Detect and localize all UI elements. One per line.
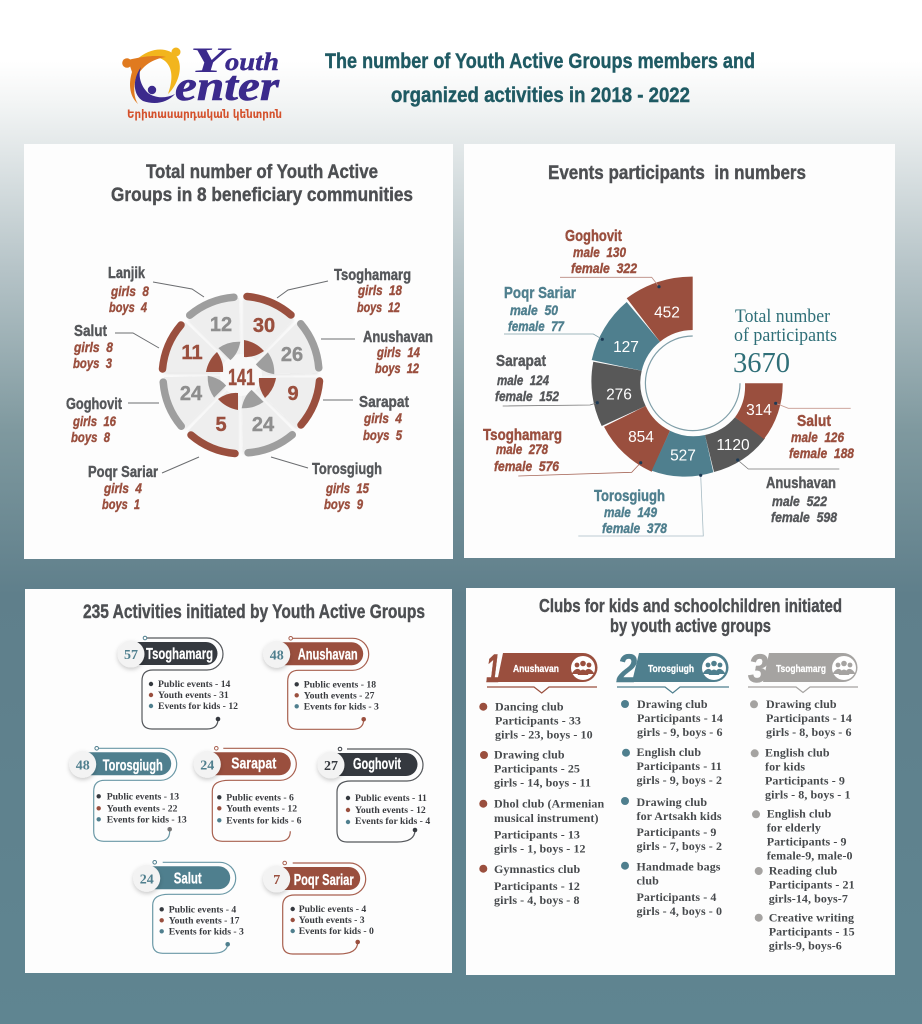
club list: Tsoghamarg: Participants - 9 (765, 774, 845, 788)
label: Goghovit (66, 396, 123, 445)
icon: yellow figure (136, 48, 180, 94)
panel: total number of groups (24, 144, 453, 559)
label: Salut: female 188 (789, 445, 854, 461)
card: Poqr Sariar: Public events - 4 (299, 904, 366, 915)
club list: Anushavan (479, 700, 604, 907)
club list: Torosgiugh: Participants - 4 (636, 890, 716, 904)
label: Anushavan: male 522 (772, 493, 827, 509)
card: Salut: Salut (174, 870, 202, 887)
label: Tsoghamarg: Tsoghamarg (483, 427, 562, 444)
heading: total groups (111, 162, 413, 206)
card: Goghovit: Events for kids - 4 (355, 816, 430, 827)
labels: communities (66, 265, 433, 512)
club list: Tsoghamarg: Participants - 9 (767, 835, 847, 849)
panel: events participants (464, 144, 895, 558)
logo wordmark: Y (190, 40, 232, 80)
label: Sarapat: boys 5 (363, 427, 402, 443)
card: Anushavan: Public events - 18 (304, 679, 376, 690)
club list: Torosgiugh: Participants - 11 (636, 759, 722, 773)
club list: Torosgiugh: girls - 9, boys - 2 (636, 773, 722, 787)
leader lines (115, 281, 355, 473)
club header 2: Torosgiugh: 2 (616, 647, 637, 691)
card: Poqr Sariar: 7 (273, 873, 280, 888)
label: Anushavan: Anushavan (766, 475, 836, 492)
card: Goghovit: 27 (324, 759, 338, 774)
card: Salut (133, 860, 244, 953)
card: Anushavan (263, 636, 379, 729)
donut values: 452 (654, 304, 680, 322)
club list: Anushavan: girls - 23, boys - 10 (495, 728, 593, 742)
card: Torosgiugh: 48 (76, 758, 90, 773)
total participants callout: of participants (734, 326, 837, 346)
label: Tsoghamarg: boys 12 (357, 299, 400, 315)
label: Goghovit: female 322 (571, 260, 637, 276)
card: Tsoghamarg: Tsoghamarg (146, 646, 213, 663)
club list: Tsoghamarg: Drawing club (766, 697, 837, 711)
panel: clubs (466, 588, 895, 975)
card: Sarapat: Public events - 6 (226, 792, 294, 803)
label: Anushavan: Anushavan (363, 329, 433, 346)
club list: Torosgiugh: girls - 7, boys - 2 (636, 839, 722, 853)
label: Anushavan: girls 14 (376, 344, 420, 360)
card: Anushavan: Youth events - 27 (304, 690, 375, 701)
label: Goghovit: Goghovit (66, 396, 123, 413)
donut values: 314 (746, 402, 772, 419)
title (325, 50, 755, 107)
label: Torosgiugh: girls 15 (325, 480, 369, 496)
heading: total groups: Total number of Youth Active (146, 162, 378, 183)
label: Tsoghamarg (483, 427, 562, 474)
label: Torosgiugh: male 149 (604, 504, 657, 520)
label: Lanjik (108, 265, 149, 315)
card: Sarapat (194, 746, 302, 841)
label: Salut (73, 323, 113, 371)
leader lines and dots (503, 277, 851, 536)
card: Sarapat: Events for kids - 6 (226, 815, 302, 826)
label: Anushavan: female 598 (771, 509, 837, 525)
heading: clubs: by youth active groups (610, 616, 771, 636)
card: Torosgiugh: Youth events - 22 (107, 803, 178, 814)
label: Poqr Sariar (504, 285, 576, 334)
club list: Anushavan: musical instrument) (494, 811, 599, 825)
label: Sarapat: Sarapat (359, 394, 410, 411)
card: Poqr Sariar (263, 861, 374, 954)
club list: Tsoghamarg: Creative writing (769, 910, 854, 924)
heading: clubs (539, 596, 842, 636)
logo: Youth Center (122, 40, 282, 121)
logo wordmark (175, 40, 280, 110)
club header 3: Tsoghamarg: 3 (748, 647, 768, 691)
club list: Anushavan: girls - 14, boys - 11 (494, 776, 591, 790)
donut chart (591, 277, 783, 477)
label: Torosgiugh (312, 461, 382, 512)
card: Tsoghamarg: Events for kids - 12 (158, 701, 238, 712)
card: Torosgiugh (69, 746, 187, 841)
card: Goghovit: Public events - 11 (355, 793, 427, 804)
club list: Torosgiugh: Participants - 14 (637, 711, 723, 725)
club header 1: Anushavan: 1 (486, 647, 500, 691)
club list: Anushavan: Participants - 25 (494, 762, 580, 776)
rosette values: 24 (180, 383, 203, 405)
club list: Torosgiugh: for Artsakh kids (636, 809, 722, 823)
label: Goghovit: boys 8 (71, 429, 110, 445)
card: Poqr Sariar: Poqr Sariar (294, 872, 354, 889)
label: Sarapat (495, 353, 559, 404)
club list: Torosgiugh: girls - 4, boys - 0 (636, 904, 722, 918)
card: Torosgiugh: Torosgiugh (103, 757, 163, 774)
card: Goghovit: Goghovit (353, 756, 401, 773)
card: Poqr Sariar: Youth events - 3 (299, 915, 365, 926)
club list: Tsoghamarg: for elderly (767, 821, 821, 835)
logo Armenian subtitle: Երիտասարդական կենտրոն (127, 107, 282, 121)
label: Poqr Sariar: Poqr Sariar (88, 464, 158, 481)
label: Sarapat: female 152 (495, 388, 559, 404)
rosette values: 141 (228, 364, 255, 390)
club list: Torosgiugh: English club (636, 745, 701, 759)
card: Poqr Sariar: Events for kids - 0 (299, 926, 374, 937)
card: Salut: 24 (140, 872, 154, 887)
label: Torosgiugh: Torosgiugh (312, 461, 382, 478)
icon: orange figure (122, 56, 166, 104)
label: Anushavan: boys 12 (375, 360, 419, 376)
club list: Anushavan: girls - 4, boys - 8 (494, 893, 580, 907)
club list: Tsoghamarg: for kids (765, 760, 805, 774)
label: Goghovit (565, 228, 637, 276)
icon: blue figure (135, 67, 175, 103)
label: Anushavan (363, 329, 433, 376)
club header 2: Torosgiugh (616, 647, 729, 693)
rosette chart (149, 283, 333, 467)
club list: Anushavan: Participants - 13 (494, 828, 580, 842)
card: Tsoghamarg: Public events - 14 (158, 679, 231, 690)
donut values: 854 (628, 429, 654, 446)
logo wordmark: enter (175, 64, 280, 110)
card: Salut: Youth events - 17 (169, 915, 240, 926)
label: Salut: male 126 (791, 429, 844, 445)
label: Salut (789, 413, 854, 461)
card: Sarapat: Sarapat (231, 755, 277, 772)
club header 3: Tsoghamarg (748, 647, 858, 692)
card: Tsoghamarg: 57 (124, 648, 138, 663)
card: Sarapat: 24 (200, 758, 214, 773)
club list: Tsoghamarg: girls - 8, boys - 6 (766, 725, 852, 739)
club list: Tsoghamarg: English club (765, 746, 830, 760)
inner ring (645, 336, 740, 431)
club header 2: Torosgiugh: Torosgiugh (648, 663, 694, 675)
label: Tsoghamarg: female 576 (494, 458, 559, 474)
rosette values: 30 (253, 315, 275, 337)
club list: Tsoghamarg: Participants - 14 (766, 711, 852, 725)
club list: Torosgiugh (621, 697, 723, 918)
label: Sarapat: Sarapat (496, 353, 547, 370)
donut values: 1120 (716, 437, 750, 454)
label: Torosgiugh: boys 9 (324, 496, 363, 512)
label: Anushavan (766, 475, 837, 525)
club list: Torosgiugh: Participants - 9 (636, 825, 716, 839)
card: Salut: Public events - 4 (169, 904, 236, 915)
card: Sarapat: Youth events - 12 (226, 803, 297, 814)
club list: Anushavan: Dhol club (Armenian (494, 797, 604, 811)
club list: Tsoghamarg: girls-14, boys-7 (769, 892, 848, 906)
donut values: 276 (606, 386, 632, 404)
club list: Tsoghamarg: girls - 8, boys - 1 (765, 788, 851, 802)
label: Poqr Sariar: girls 4 (103, 480, 142, 496)
total participants callout: Total number (735, 307, 830, 327)
total participants callout (733, 307, 837, 379)
club list: Tsoghamarg: Reading club (769, 864, 838, 878)
rosette values: 26 (281, 344, 303, 366)
rosette values: 12 (210, 314, 232, 336)
label: Tsoghamarg (334, 267, 411, 315)
label: Sarapat (359, 394, 410, 443)
rosette values: 9 (287, 383, 299, 405)
club list: Torosgiugh: Drawing club (637, 697, 708, 711)
label: Lanjik: boys 4 (109, 299, 147, 315)
logo wordmark: outh (225, 49, 279, 76)
labels: participants (483, 228, 854, 536)
label: Poqr Sariar: boys 1 (102, 496, 140, 512)
card: Torosgiugh: Public events - 13 (107, 791, 179, 802)
club list: Torosgiugh: girls - 9, boys - 6 (637, 725, 723, 739)
label: Salut: Salut (74, 323, 108, 340)
heading: events participants: Events participants in numbers (548, 163, 806, 184)
club list: Anushavan: Participants - 33 (495, 714, 581, 728)
club list: Tsoghamarg: female-9, male-0 (767, 849, 853, 863)
club list: Tsoghamarg: English club (767, 807, 832, 821)
card: Anushavan: Events for kids - 3 (304, 701, 379, 712)
club list: Anushavan: girls - 1, boys - 12 (494, 842, 586, 856)
rosette values (180, 314, 303, 436)
label: Goghovit: girls 16 (72, 413, 116, 429)
label: Lanjik: girls 8 (110, 283, 149, 299)
heading: total groups: Groups in 8 beneficiary communities (111, 185, 413, 206)
label: Salut: girls 8 (73, 339, 113, 355)
club list: Tsoghamarg: Participants - 15 (769, 924, 855, 938)
card: Goghovit (318, 747, 430, 842)
card: Tsoghamarg: Youth events - 31 (158, 690, 229, 701)
card: Torosgiugh: Events for kids - 13 (107, 814, 187, 825)
donut values: 127 (613, 339, 639, 356)
donut values (606, 304, 772, 464)
club header 3: Tsoghamarg: Tsoghamarg (776, 663, 826, 675)
rosette values: 11 (181, 342, 203, 364)
label: Goghovit: Goghovit (565, 228, 623, 245)
label: Torosgiugh: female 378 (602, 520, 667, 536)
panel: activities (25, 589, 452, 973)
label: Tsoghamarg: girls 18 (357, 282, 402, 298)
label: Poqr Sariar: Poqr Sariar (504, 285, 576, 302)
club list: Anushavan: Participants - 12 (494, 879, 580, 893)
card: Anushavan: Anushavan (298, 646, 358, 663)
club list: Torosgiugh: club (636, 874, 659, 888)
label: Poqr Sariar: male 50 (510, 302, 558, 318)
donut values: 527 (670, 448, 696, 464)
club header 1: Anushavan: Anushavan (513, 663, 559, 675)
club list: Anushavan: Dancing club (495, 700, 564, 714)
heading: clubs: Clubs for kids and schoolchildren initiated (539, 596, 842, 616)
card: Goghovit: Youth events - 12 (355, 805, 426, 816)
label: Sarapat: girls 4 (363, 410, 402, 426)
club list: Anushavan: Gymnastics club (494, 862, 580, 876)
label: Tsoghamarg: male 278 (496, 441, 548, 457)
club list: Tsoghamarg: girls-9, boys-6 (769, 938, 842, 952)
label: Goghovit: male 130 (573, 244, 626, 260)
card: Salut: Events for kids - 3 (169, 926, 244, 937)
label: Torosgiugh (594, 488, 667, 536)
label: Lanjik: Lanjik (108, 265, 145, 282)
heading: activities: 235 Activities initiated by Youth Active Groups (83, 602, 425, 623)
card: Anushavan: 48 (270, 648, 284, 663)
label: Sarapat: male 124 (497, 372, 549, 388)
rosette values: 5 (215, 414, 227, 436)
rosette values: 24 (252, 414, 275, 436)
label: Poqr Sariar (88, 464, 158, 512)
club list: Tsoghamarg (750, 697, 855, 952)
club list: Torosgiugh: Drawing club (636, 795, 707, 809)
club list: Anushavan: Drawing club (494, 748, 565, 762)
total participants callout: 3670 (733, 348, 790, 379)
label: Torosgiugh: Torosgiugh (594, 488, 665, 505)
club list: Tsoghamarg: Participants - 21 (769, 877, 855, 891)
title: The number of Youth Active Groups members and (325, 50, 755, 73)
label: Tsoghamarg: Tsoghamarg (334, 267, 411, 284)
club header 1: Anushavan (486, 647, 598, 693)
club list: Torosgiugh: Handmade bags (636, 860, 721, 874)
label: Poqr Sariar: female 77 (508, 318, 565, 334)
label: Salut: boys 3 (73, 355, 112, 371)
label: Salut: Salut (797, 413, 832, 430)
card: Tsoghamarg (118, 636, 238, 729)
title: organized activities in 2018 - 2022 (391, 84, 690, 107)
